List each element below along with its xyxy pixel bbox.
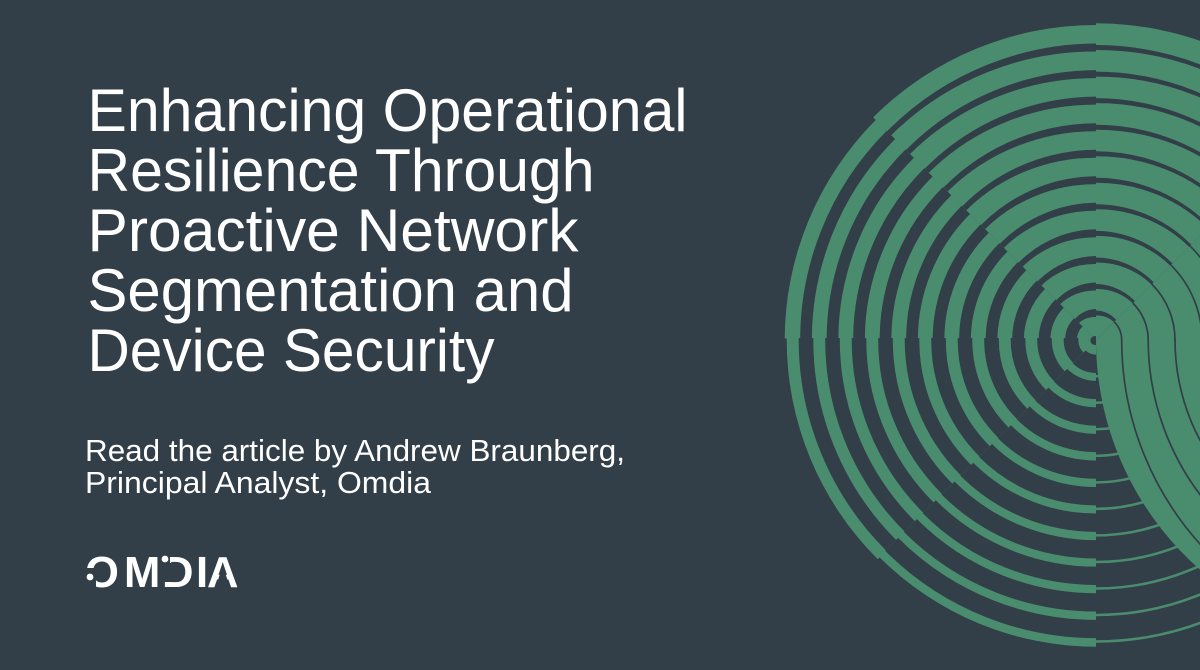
title: Resilience Through <box>88 137 594 204</box>
title: Segmentation and <box>88 257 574 324</box>
ring sector: top right lower <box>1096 236 1200 340</box>
curved green tail <box>1096 340 1200 578</box>
ring sector: top right upper <box>1096 23 1200 340</box>
title: Device Security <box>88 317 494 384</box>
ring sector: bottom left lower <box>880 344 1096 647</box>
logo: Omdia wordmark: M <box>124 549 160 597</box>
ring sector: bottom left upper <box>786 338 1092 560</box>
concentric ring graphic <box>784 23 1200 647</box>
title <box>88 77 688 384</box>
byline text <box>85 433 625 500</box>
byline text: Principal Analyst, Omdia <box>85 465 432 500</box>
logo: Omdia wordmark <box>84 549 238 597</box>
logo: Omdia wordmark: I <box>196 549 208 597</box>
thin lines inside tail <box>1122 339 1200 555</box>
ring sector: top left upper <box>873 25 1096 336</box>
ring sector: bottom right thin arcs <box>1096 374 1200 643</box>
title: Enhancing Operational <box>88 77 688 144</box>
ring sector: top left lower <box>784 120 1092 338</box>
centre dot <box>1090 336 1096 345</box>
logo: Omdia wordmark: O <box>85 549 119 597</box>
logo: Omdia wordmark: D <box>162 549 193 597</box>
logo: Omdia wordmark: A <box>207 549 238 597</box>
title: Proactive Network <box>88 197 580 264</box>
byline text: Read the article by Andrew Braunberg, <box>85 433 625 468</box>
